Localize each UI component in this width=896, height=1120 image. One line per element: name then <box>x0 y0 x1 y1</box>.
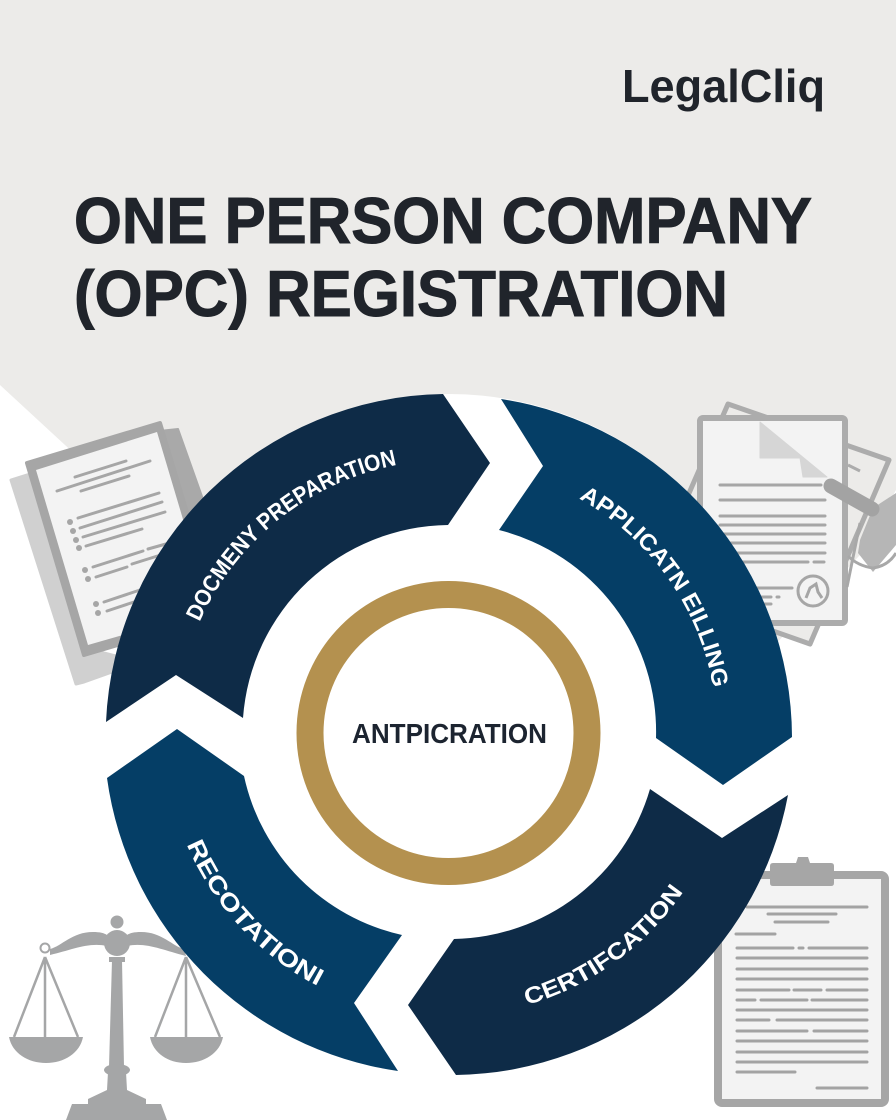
segment: document preparation <box>106 394 490 722</box>
icon: clipboard with document, lower right <box>718 857 885 1103</box>
segment: certification <box>408 789 788 1075</box>
segment: registration <box>107 729 402 1071</box>
segment: registration: RECOTATIONI <box>187 839 324 986</box>
title <box>74 184 812 330</box>
cycle diagram <box>106 394 792 1075</box>
segment: application filing <box>499 399 792 785</box>
title: (OPC) REGISTRATION <box>74 257 728 330</box>
icon: stacked contract with pen, upper right <box>648 404 896 644</box>
icon: scales of justice, lower left <box>9 916 223 1120</box>
segment: document preparation: DOCMENY PREPARATION <box>186 450 396 621</box>
icon: checklist document, upper left <box>11 423 218 684</box>
center ring <box>310 594 587 872</box>
center label: ANTPICRATION <box>352 718 547 749</box>
segment: application filing: APPLICATN EILLING <box>580 488 728 686</box>
title: ONE PERSON COMPANY <box>74 184 812 257</box>
logo: LegalCliq: LegalCliq <box>622 60 825 112</box>
segment: certification: CERTIFCATION <box>525 884 682 1003</box>
